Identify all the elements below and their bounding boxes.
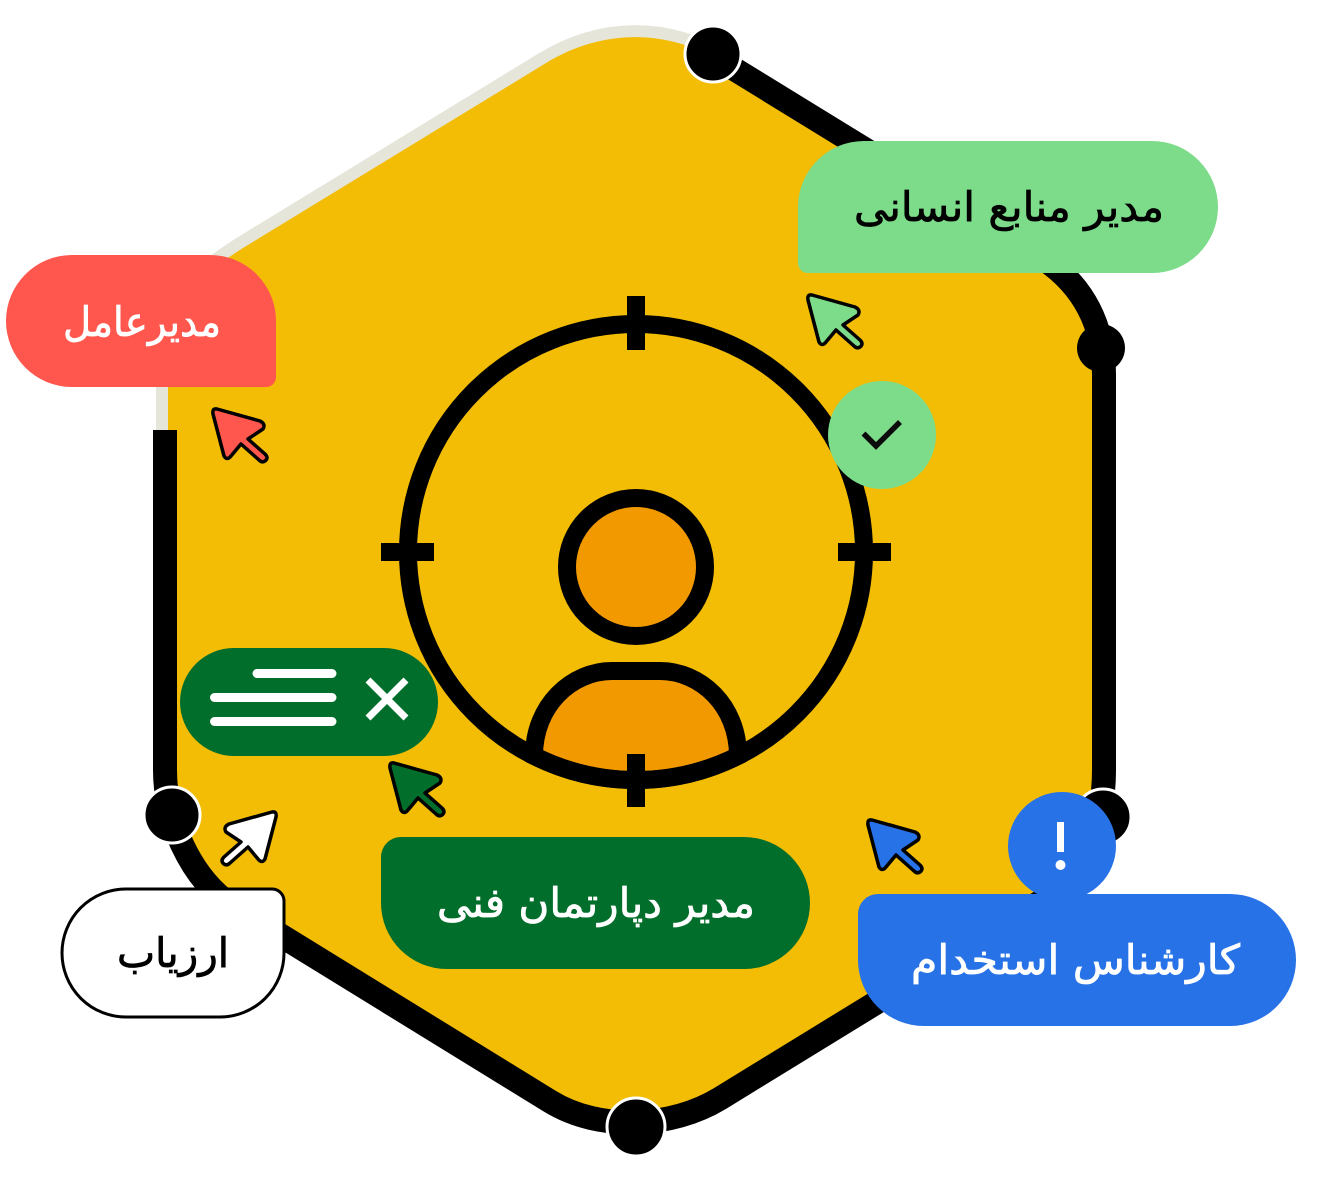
person body <box>534 671 738 780</box>
hexagon background <box>168 37 1104 1122</box>
pill: technical department manager: مدیر دپارتمان فنی <box>437 879 755 928</box>
pill: HR manager: مدیر منابع انسانی <box>854 183 1164 231</box>
node: left <box>144 787 200 843</box>
check badge <box>828 381 936 489</box>
node: right <box>1077 324 1125 372</box>
target with person icon <box>381 296 891 807</box>
cursor: blue <box>868 820 922 873</box>
pill: assessor: ارزیاب <box>117 929 229 977</box>
target ticks <box>381 296 891 807</box>
cursor: red <box>213 409 267 462</box>
hexagon black progress outline <box>165 56 1104 1122</box>
cursor: green <box>808 295 862 348</box>
pill: CEO: مدیرعامل <box>63 298 221 346</box>
target ring <box>408 324 864 780</box>
pill: recruitment specialist: کارشناس استخدام <box>911 936 1240 984</box>
pill: HR manager <box>798 141 1218 273</box>
pill: assessor <box>62 889 284 1017</box>
pill: technical department manager <box>381 837 810 969</box>
pill: CEO <box>6 255 276 387</box>
node: lower right <box>1075 789 1131 845</box>
node: top <box>685 26 741 82</box>
alert badge <box>1008 792 1116 900</box>
cursor: white <box>222 812 276 865</box>
pill: recruitment specialist <box>858 894 1296 1026</box>
cursor: dark green <box>390 763 444 816</box>
rejection menu pill <box>180 648 438 756</box>
node: bottom <box>607 1098 665 1156</box>
person head <box>567 498 705 636</box>
